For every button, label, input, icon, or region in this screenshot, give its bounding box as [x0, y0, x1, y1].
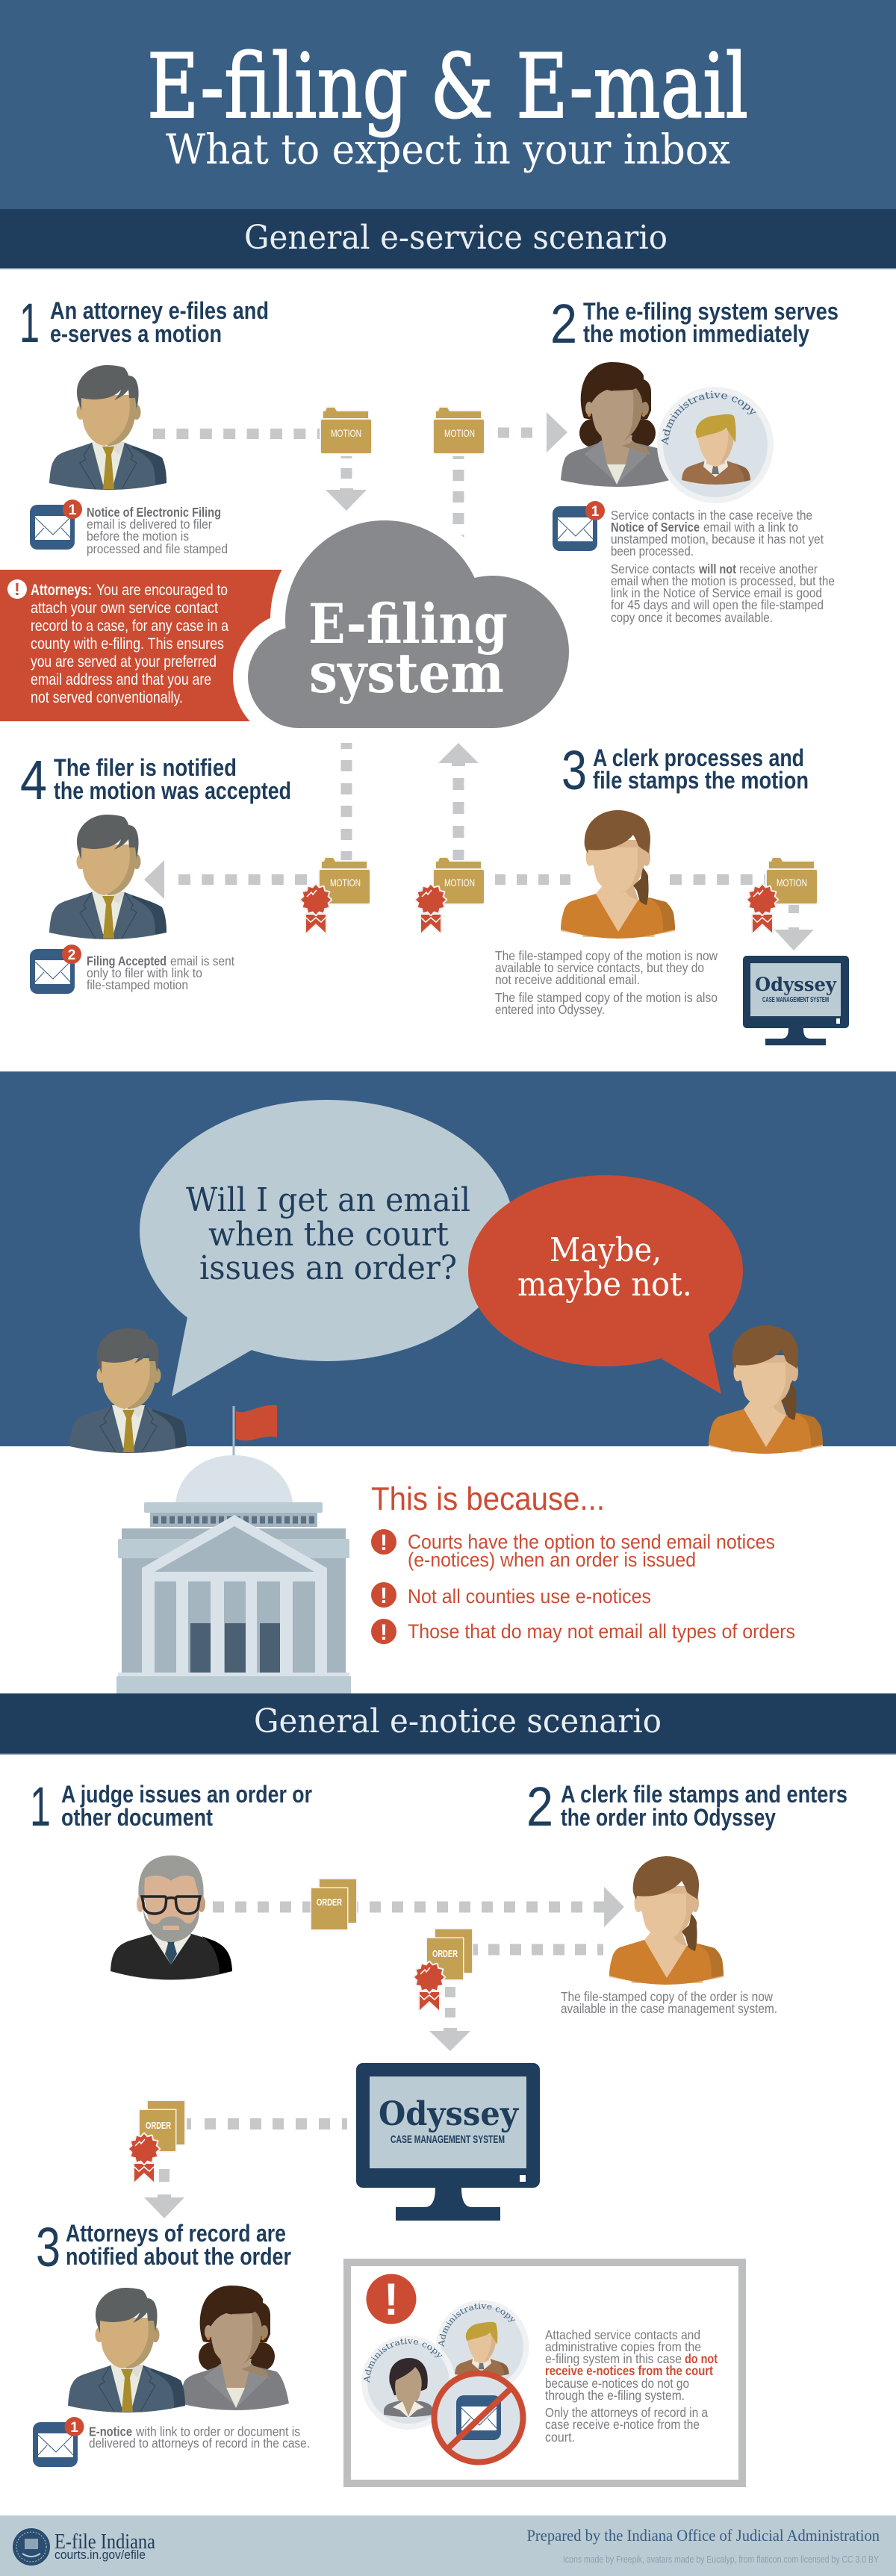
- step 2 heading: the motion immediately: [583, 320, 809, 347]
- arrow: order down to attorneys: [144, 2169, 184, 2218]
- text: service contacts notice: receive another: [739, 561, 818, 576]
- text: notice of electronic filing: [87, 505, 228, 556]
- reason: courts have the option: !: [380, 1531, 388, 1555]
- text: e-notice delivered: delivered to attorneys of record in the case.: [89, 2436, 310, 2451]
- text: service contacts notice: [611, 508, 835, 625]
- arrow: attorney to folder: [153, 429, 320, 439]
- step 3 heading: file stamps the motion: [593, 767, 809, 794]
- subtitle: What to expect in your inbox: [166, 125, 730, 173]
- icon: stamped motion folder: [301, 858, 370, 933]
- icon: administrative copy man: Administrative copy: [438, 2303, 515, 2348]
- e-notice step 2 heading: the order into Odyssey: [561, 1804, 776, 1831]
- icon: motion folder: MOTION: [331, 427, 361, 439]
- section band: General e-service scenario: [0, 209, 896, 269]
- arrow: stamped order down to Odyssey: [429, 1987, 470, 2051]
- text: notice of electronic filing: processed and file stamped: [87, 541, 228, 556]
- e-notice step 2 heading: 2: [526, 1776, 553, 1838]
- step 2 heading: The e-filing system serves: [583, 298, 839, 325]
- icon: attorneys of record: [68, 2286, 289, 2412]
- text: do not receive e-notices: do not: [685, 2351, 718, 2366]
- step 2 heading: [550, 293, 839, 355]
- text: service contacts notice: copy once it becomes available.: [611, 610, 773, 625]
- icon: administrative copy woman: [361, 2336, 455, 2430]
- icon: warning circle: [366, 2274, 417, 2324]
- icon: administrative copy man: [436, 2300, 529, 2383]
- icon: clerk answering: [709, 1325, 823, 1454]
- text: e-file Indiana logo: courts.in.gov/efile: [55, 2548, 146, 2562]
- section band: General e-service scenario: General e-service scenario: [244, 219, 668, 257]
- text: e-notice delivered: [89, 2424, 310, 2451]
- icon: courthouse: [116, 1405, 351, 1693]
- reason: courts have the option: Courts have the option to send email notices: [408, 1531, 775, 1553]
- text: e-notice delivered: E-notice: [89, 2424, 132, 2439]
- text: prepared by: Prepared by the Indiana Office of Judicial Administration: [527, 2526, 880, 2545]
- arrow: folder up to cloud: [438, 743, 479, 860]
- icon: motion folder: [321, 408, 371, 453]
- text: filing accepted: only to filer with link to: [87, 965, 202, 980]
- panel: attorneys callout: you are served at your preferred: [31, 653, 217, 671]
- text: order available: The file-stamped copy of the order is now: [561, 1989, 773, 2004]
- arrow: Odyssey to attorneys: [187, 2118, 347, 2129]
- icon: motion folder: MOTION: [444, 427, 475, 439]
- text: filing accepted: [87, 953, 234, 992]
- panel: attorneys callout: record to a case, for any case in a: [31, 617, 228, 635]
- text: do not receive e-notices: e-filing system in this case: [545, 2351, 682, 2366]
- text: service contacts notice: for 45 days and will open the file-stamped: [611, 597, 824, 612]
- icon: large Odyssey monitor: [356, 2063, 540, 2221]
- icon: administrative copy woman: Administrative copy: [364, 2338, 442, 2383]
- panel: attorneys callout: [0, 570, 299, 721]
- icon: order document: ORDER: [317, 1897, 342, 1908]
- e-notice step 3 heading: notified about the order: [66, 2243, 291, 2270]
- email icon with badge: 1: [69, 503, 77, 518]
- text: do not receive e-notices: [545, 2327, 718, 2445]
- email icon with badge: [30, 500, 82, 550]
- arrow: folder to Odyssey: [774, 905, 814, 951]
- icon: stamped motion folder: [416, 858, 484, 933]
- text: filing accepted: file-stamped motion: [87, 977, 188, 992]
- reason: not all counties: !: [380, 1584, 388, 1608]
- email icon with badge: [553, 501, 605, 551]
- icon: Odyssey monitor: [743, 956, 849, 1045]
- cloud: e-filing system: [248, 520, 569, 728]
- step 4 heading: 4: [20, 749, 47, 811]
- speech bubble: answer: maybe not.: [517, 1266, 692, 1304]
- text: service contacts notice: link in the Notice of Service email is good: [611, 585, 822, 600]
- icon: stamped motion folder: MOTION: [330, 877, 361, 889]
- step 2 heading: 2: [550, 293, 577, 355]
- icon: service contact avatar: [561, 362, 670, 487]
- step 4 heading: [20, 749, 291, 811]
- text: do not receive e-notices: Attached service contacts and: [545, 2327, 700, 2342]
- step 1 heading: e-serves a motion: [50, 320, 222, 347]
- text: service contacts notice: been processed.: [611, 544, 694, 559]
- text: file-stamped copy: The file-stamped copy of the motion is now: [495, 948, 718, 963]
- text: order available: [561, 1989, 777, 2016]
- step 1 heading: 1: [19, 292, 40, 354]
- text: service contacts notice: Service contacts in the case receive the: [611, 508, 812, 523]
- cloud: e-filing system: E-filing: [308, 592, 508, 656]
- panel: attorneys callout: attach your own service contact: [31, 600, 218, 617]
- e-notice step 1 heading: other document: [61, 1804, 213, 1831]
- text: order available: available in the case management system.: [561, 2001, 777, 2016]
- cloud: e-filing system: system: [309, 641, 504, 706]
- email icon with badge: [33, 2417, 84, 2467]
- e-notice step 2 heading: A clerk file stamps and enters: [561, 1781, 847, 1808]
- text: do not receive e-notices: administrative copies from the: [545, 2339, 701, 2354]
- speech bubble: question: [140, 1100, 514, 1396]
- arrow: cloud up to folder: [452, 456, 464, 546]
- arrow: folder down to cloud: [326, 456, 367, 511]
- icon: large Odyssey monitor: CASE MANAGEMENT SYSTEM: [391, 2133, 505, 2146]
- text: filing accepted: email is sent: [170, 953, 234, 968]
- icon: order document: [311, 1879, 356, 1929]
- email icon with badge: 2: [68, 948, 75, 963]
- e-notice step 3 heading: 3: [36, 2216, 60, 2278]
- icon: attorney asking: [69, 1328, 187, 1453]
- icon: large Odyssey monitor: Odyssey: [379, 2095, 519, 2133]
- panel: footer: [0, 2515, 896, 2576]
- text: service contacts notice: Service contacts: [611, 561, 695, 576]
- icon: stamped order document: [129, 2101, 184, 2182]
- step 4 heading: the motion was accepted: [54, 777, 291, 804]
- panel: attorneys callout: email address and that you are: [31, 671, 211, 688]
- speech bubble: question: issues an order?: [199, 1249, 457, 1287]
- icon: Odyssey monitor: CASE MANAGEMENT SYSTEM: [762, 996, 829, 1004]
- icon: stamped order document: [414, 1929, 472, 2010]
- e-notice step 3 heading: [36, 2216, 291, 2278]
- icon: stamped motion folder: MOTION: [444, 877, 475, 889]
- reason: not all counties: Not all counties use e-notices: [408, 1585, 651, 1608]
- text: notice of electronic filing: email is delivered to filer: [87, 517, 212, 532]
- step 3 heading: 3: [561, 739, 587, 801]
- icon: stamped order document: ORDER: [432, 1948, 458, 1959]
- text: notice of electronic filing: Notice of Electronic Filing: [87, 505, 221, 520]
- icon: motion folder: [434, 408, 484, 453]
- text: e-file Indiana logo: [55, 2530, 155, 2562]
- icon: Indiana courts seal: [13, 2528, 50, 2566]
- arrow: cloud down to folder: [340, 743, 352, 860]
- text: do not receive e-notices: through the e-filing system.: [545, 2388, 685, 2403]
- icon: clerk avatar: [609, 1856, 724, 1985]
- e-notice step 1 heading: [30, 1776, 312, 1838]
- text: service contacts notice: unstamped motion, because it has not yet: [611, 532, 824, 547]
- text: do not receive e-notices: receive e-notices from the court: [545, 2363, 713, 2378]
- icon: no email symbol: [435, 2373, 523, 2463]
- reason: not all types of orders: !: [380, 1620, 388, 1645]
- e-notice step 2 heading: [526, 1776, 847, 1838]
- arrow: folder to filer: [144, 860, 318, 899]
- icon: administrative copy badge: [657, 387, 774, 503]
- text: service contacts notice: email with a link to: [703, 520, 798, 535]
- icon: judge avatar: [111, 1855, 232, 1980]
- icon: stamped motion folder: [747, 858, 817, 933]
- e-notice step 3 heading: Attorneys of record are: [66, 2220, 286, 2247]
- arrow: judge to clerk: [213, 1887, 624, 1927]
- reason: courts have the option: [371, 1529, 775, 1571]
- text: filing accepted: Filing Accepted: [87, 953, 167, 968]
- title: E-filing & E-mail: [147, 36, 748, 139]
- text: file-stamped copy: available to service contacts, but they do: [495, 960, 704, 975]
- icon: attorney avatar: [49, 365, 167, 490]
- text: e-notice delivered: with link to order or document is: [135, 2424, 300, 2439]
- step 3 heading: [561, 739, 809, 801]
- heading: this is because: This is because...: [371, 1481, 605, 1517]
- panel: attorneys callout: Attorneys:: [31, 582, 92, 599]
- icon: stamped motion folder: MOTION: [777, 877, 807, 889]
- text: service contacts notice: email when the motion is processed, but the: [611, 573, 835, 588]
- reason: courts have the option: (e-notices) when an order is issued: [408, 1549, 696, 1571]
- step 4 heading: The filer is notified: [54, 754, 237, 781]
- panel: attorneys callout: not served conventionally.: [31, 689, 183, 706]
- speech bubble: answer: Maybe,: [550, 1231, 662, 1269]
- step 1 heading: An attorney e-files and: [50, 297, 269, 324]
- speech bubble: answer: [468, 1175, 743, 1394]
- arrow: clerk to folder: [495, 874, 571, 885]
- panel: attorneys callout: county with e-filing. This ensures: [31, 635, 224, 653]
- section band: General e-notice scenario: [0, 1693, 896, 1755]
- e-notice step 1 heading: 1: [30, 1776, 51, 1838]
- text: e-file Indiana logo: E-file Indiana: [55, 2530, 155, 2554]
- text: file-stamped copy: entered into Odyssey.: [495, 1002, 605, 1017]
- panel: attorneys callout: !: [14, 579, 20, 599]
- email icon with badge: 1: [70, 2420, 78, 2436]
- e-notice step 1 heading: A judge issues an order or: [61, 1781, 312, 1808]
- text: notice of electronic filing: before the motion is: [87, 529, 189, 544]
- text: do not receive e-notices: because e-notices do not go: [545, 2376, 689, 2391]
- arrow: clerk to folder: [670, 874, 765, 885]
- text: file-stamped copy: not receive additional email.: [495, 972, 640, 987]
- icon: warning circle: !: [384, 2274, 399, 2324]
- reason: not all types of orders: Those that do may not email all types of orders: [408, 1620, 795, 1643]
- text: service contacts notice: will not: [698, 561, 736, 576]
- text: service contacts notice: Notice of Service: [611, 520, 700, 535]
- panel: administrative copies warning: [343, 2259, 746, 2487]
- text: do not receive e-notices: Only the attorneys of record in a: [545, 2405, 708, 2420]
- email icon with badge: [30, 945, 81, 994]
- email icon with badge: 1: [591, 504, 600, 520]
- icon: filer avatar: [49, 815, 167, 939]
- icon: Odyssey monitor: Odyssey: [755, 974, 837, 995]
- icon: administrative copy badge: Administrative copy: [662, 391, 756, 445]
- step 1 heading: [19, 292, 269, 354]
- section band: General e-notice scenario: General e-notice scenario: [254, 1702, 662, 1740]
- text: file-stamped copy: The file stamped copy of the motion is also: [495, 990, 718, 1005]
- speech bubble: question: Will I get an email: [186, 1181, 470, 1219]
- text: do not receive e-notices: court.: [545, 2430, 575, 2445]
- header panel: [0, 0, 896, 209]
- icon: stamped order document: ORDER: [146, 2120, 171, 2131]
- text: do not receive e-notices: case receive e-notice from the: [545, 2417, 700, 2432]
- arrow: folder to service contact: [498, 412, 567, 452]
- text: file-stamped copy: [495, 948, 718, 1017]
- arrow: clerk to stamped order: [473, 1944, 603, 1955]
- step 3 heading: A clerk processes and: [593, 744, 804, 771]
- panel: attorneys callout: You are encouraged to: [96, 582, 228, 599]
- speech bubble: question: when the court: [208, 1216, 449, 1254]
- icon: clerk avatar: [561, 810, 675, 939]
- panel: question section background: [0, 1071, 896, 1446]
